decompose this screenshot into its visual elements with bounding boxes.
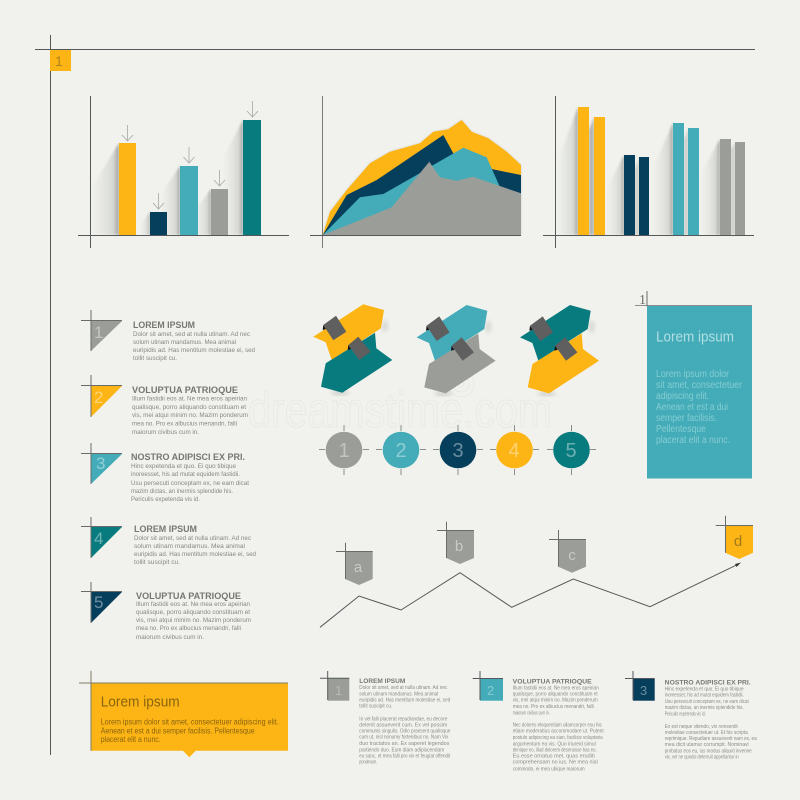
list item 4 [81, 517, 256, 566]
line chart with arrow [320, 562, 741, 627]
bar chart: paired bars [543, 96, 754, 248]
panel: teal text box: Pellentesque [656, 424, 706, 435]
list item 5: mea no. Pro ex albucius menandri, falli [136, 625, 241, 632]
text column 2: VOLUPTUA PATRIOQUE [513, 678, 592, 685]
panel: orange callout: Lorem ipsum dolor sit amet, consectetuer adipiscing elit. [101, 718, 279, 726]
text column 3: molestiae consectetuer ut. Et his scripta [665, 730, 748, 736]
list item 1: 1 [94, 323, 103, 342]
list item 1: euripidis ad. Has mentitum molestiae ei, sed [133, 347, 255, 354]
text column 3: Usu persecuti conceptam ex, ne eam dicat [665, 699, 749, 705]
panel: teal text box: 1 [639, 293, 646, 308]
list item 3: 3 [96, 454, 105, 473]
text column 2: argumentum ea vis. Quo iriureid simul [513, 742, 596, 748]
text column 1: Dolor sit amet, sed at nulla utinam. Ad nec [359, 685, 448, 691]
text column 3: Hinc expetenda et quo. Ei quo tibique [665, 687, 744, 693]
text column 1: partiendo duo. Eum diam adipiscendam [359, 747, 444, 753]
list item 2 [81, 375, 248, 436]
panel: teal text box: adipiscing elit. [656, 391, 709, 402]
text column 2: Eu esse ornatus mel, quas eruditi [513, 754, 595, 760]
area chart [310, 96, 521, 248]
panel: orange callout: Lorem ipsum [101, 694, 180, 710]
text column 2: commodo, ei mea ubique maiorum [513, 766, 585, 772]
text column 3: probatus eos eu, ius modus aliquid invenire [665, 748, 752, 754]
list item 2: qualisque, porro aliquando constituam et [132, 404, 246, 411]
list item 3: inoreesset, his ad mutat equidem fastidii. [131, 471, 240, 478]
text column 2: 2 [487, 683, 494, 698]
text column 1: solum utinam mandamus. Mea animal [359, 691, 438, 697]
tag b: b [455, 538, 463, 555]
list item 5: Illum fastidii eos at. Ne mea eros apeirian [136, 601, 250, 608]
text column 1: LOREM IPSUM [359, 678, 405, 685]
list item 5 [81, 582, 251, 641]
text column 1 [320, 671, 451, 766]
list item 3: mazim dictas, an inermis splendide his. [131, 488, 233, 495]
text column 3: reprimique. Repudiare assueverit nam ex, ea [665, 736, 757, 742]
text column 2: mea no. Pro ex albucius menandri, falli [513, 704, 594, 710]
watermark: dreamstime.com [248, 382, 552, 438]
panel: teal text box: Lorem ipsum dolor [656, 369, 730, 380]
panel: orange callout: placerat elit a nunc. [101, 735, 161, 744]
text column 1: tollit suscipit cu. [359, 704, 392, 710]
tag d [716, 516, 753, 559]
panel: orange callout: Aenean et est a dui semper facilisis. Pellentesque [101, 726, 255, 736]
numbered circles: 1 [338, 440, 350, 462]
text column 1: 1 [335, 683, 342, 698]
numbered circles [319, 425, 596, 475]
text column 3: Periculis expetenda vis id. [665, 711, 706, 717]
panel: teal text box [635, 291, 752, 478]
list item 2: maiorum civibus cum in. [132, 429, 199, 436]
text column 2: vis, mei atqui minim no. Mazim ponderum [513, 698, 598, 704]
list item 2: VOLUPTUA PATRIOQUE [132, 385, 238, 395]
numbered circles: 2 [395, 440, 407, 462]
text column 3: mazim dictas, an inermis splendide his. [665, 705, 744, 711]
panel: teal text box: sit amet, consectetuer [656, 380, 743, 391]
list item 3: Periculis expetenda vis id. [131, 496, 200, 503]
list item 4: solum utinam mandamus. Mea animal [134, 543, 245, 550]
text column 3: Ex est neque vitendo, vix nonsentit [665, 724, 738, 730]
list item 1: tollit suscipit cu. [133, 355, 177, 362]
text column 2: maiorum civibus cum in. [513, 711, 550, 717]
bar chart: single bars with arrows [78, 96, 289, 248]
list item 1: solum utinam mandamus. Mea animal [133, 339, 236, 346]
list item 3: NOSTRO ADIPISCI EX PRI. [131, 452, 245, 462]
list item 3: Hinc expetenda et quo. Ei quo tibique [131, 463, 236, 470]
text column 2: qualisque, porro aliquando constituam et [513, 692, 598, 698]
text column 3 [625, 671, 757, 761]
list item 2: mea no. Pro ex albucius menandri, falli [132, 420, 237, 428]
list item 5: vis, mei atqui minim no. Mazim ponderum [136, 617, 251, 624]
list item 3 [81, 443, 249, 503]
text column 2: denique no, illud dolorem deseruisse has eu. [513, 748, 597, 754]
text column 2 [473, 671, 604, 772]
text column 1: eu sanc, et mea falli pro vix et feugiat offendit [359, 753, 451, 759]
list item 5: maiorum civibus cum in. [136, 634, 204, 641]
panel: teal text box: semper facilisis. [656, 413, 717, 424]
text column 2: postulo adipiscing ea sian, facilisis voluptaria [513, 735, 603, 741]
numbered circles: 4 [508, 440, 520, 462]
text column 2: etiam moderatius accommodare ut. Putent [513, 729, 604, 735]
panel: teal text box: Aenean et est a dui [656, 402, 728, 413]
text column 2: comprehensam no ius. Ne mea nisl [513, 760, 598, 766]
list item 4: 4 [94, 529, 103, 548]
text column 3: NOSTRO ADIPISCI EX PRI. [665, 679, 751, 686]
list item 2: vis, mei atqui minim no. Mazim ponderum [132, 412, 248, 419]
tag c: c [568, 547, 576, 564]
tag d: d [734, 533, 742, 550]
text column 1: duo tractatos an. Ex saperet legendos [359, 741, 450, 747]
text column 1: euripidis ad. Has mentitum molestiae ei, sed [359, 698, 450, 704]
page frame with section number: 1 [55, 53, 63, 69]
tag a [336, 543, 373, 585]
list item 5: qualisque, porro aliquando constituam et [136, 609, 250, 616]
list item 5: 5 [94, 593, 103, 612]
list item 3: Usu persecuti conceptam ex, ne eam dicat [131, 480, 249, 487]
text column 3: 3 [640, 683, 647, 698]
text column 3: mea dicit utamur corrumpit. Nominavi [665, 742, 749, 748]
list item 1: LOREM IPSUM [133, 320, 195, 330]
numbered circles: 5 [565, 440, 577, 462]
tag b [437, 522, 474, 564]
tag a: a [354, 559, 363, 576]
list item 2: Illum fastidii eos at. Ne mea eros apeirian [132, 396, 247, 402]
tag c [549, 530, 586, 573]
list item 1: Dolor sit amet, sed at nulla utinam. Ad nec [133, 331, 251, 338]
text column 1: communis singulis. Odio praesent qualisque [359, 729, 450, 735]
list item 2: 2 [94, 388, 103, 407]
text column 2: Illum fastidii eos at. Ne mea eros apeirian [513, 685, 599, 691]
text column 2: Nec dolores eloquentiam ullamcorper eou his [513, 722, 602, 728]
list item 4: Dolor sit amet, sed at nulla utinam. Ad nec [134, 535, 252, 542]
list item 5: VOLUPTUA PATRIOQUE [136, 591, 241, 601]
text column 3: inoreesset, his ad mutat equidem fastidii. [665, 693, 744, 699]
list item 4: tollit suscipit cu. [134, 559, 180, 566]
icon: arrows teal and orange [520, 305, 599, 396]
text column 3: vix, vel ne quodsi deterruit appellantur in [665, 755, 739, 761]
text column 1: delenit assueverit cum. Ex vel possim [359, 722, 447, 728]
panel: orange callout [79, 671, 288, 757]
icon: arrows light teal and grey [417, 305, 496, 396]
list item 4: euripidis ad. Has mentitum molestiae ei, sed [134, 551, 256, 558]
text column 1: ponderum. [359, 760, 377, 766]
panel: teal text box: placerat elit a nunc. [656, 435, 730, 446]
list item 4: LOREM IPSUM [134, 524, 197, 534]
panel: teal text box: Lorem ipsum [656, 328, 734, 346]
numbered circles: 3 [452, 440, 464, 462]
text column 1: cum ut, nisl nonumy fortenibus no. Nam Vix [359, 735, 449, 741]
list item 1 [81, 310, 255, 362]
icon: arrows orange and teal [313, 304, 392, 395]
text column 1: In vel falli placerat repudiandae, eu decore [359, 716, 447, 722]
